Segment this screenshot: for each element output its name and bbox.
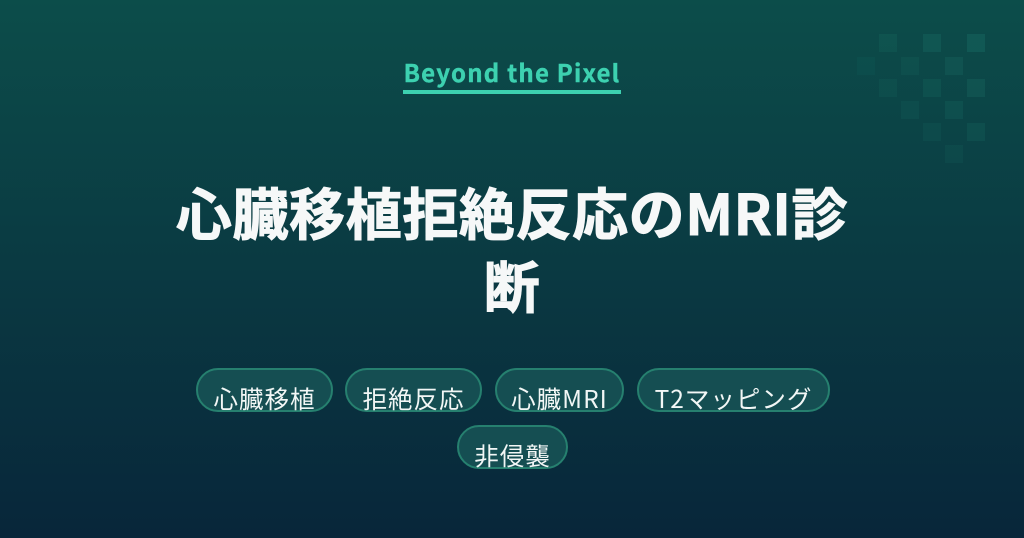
tag: 心臓MRI — [494, 368, 624, 412]
decorative square pattern — [879, 34, 985, 141]
title: 心臓移植拒絶反応のMRI診 — [176, 171, 848, 252]
tag: 拒絶反応: 拒絶反応 — [362, 381, 464, 416]
tag: 非侵襲: 非侵襲 — [474, 438, 551, 473]
tags — [196, 368, 830, 473]
tag: 拒絶反応 — [344, 368, 482, 412]
title: 断 — [484, 244, 540, 325]
tag: 心臓移植 — [196, 368, 332, 412]
tag: T2マッピング: T2マッピング — [655, 381, 812, 416]
title — [176, 171, 848, 325]
tag: 心臓MRI: 心臓MRI — [511, 381, 608, 416]
tag: 非侵襲 — [456, 424, 568, 469]
tag: T2マッピング — [636, 368, 830, 412]
brand label with underline: Beyond the Pixel — [404, 54, 620, 89]
tag: 心臓移植: 心臓移植 — [214, 381, 316, 416]
